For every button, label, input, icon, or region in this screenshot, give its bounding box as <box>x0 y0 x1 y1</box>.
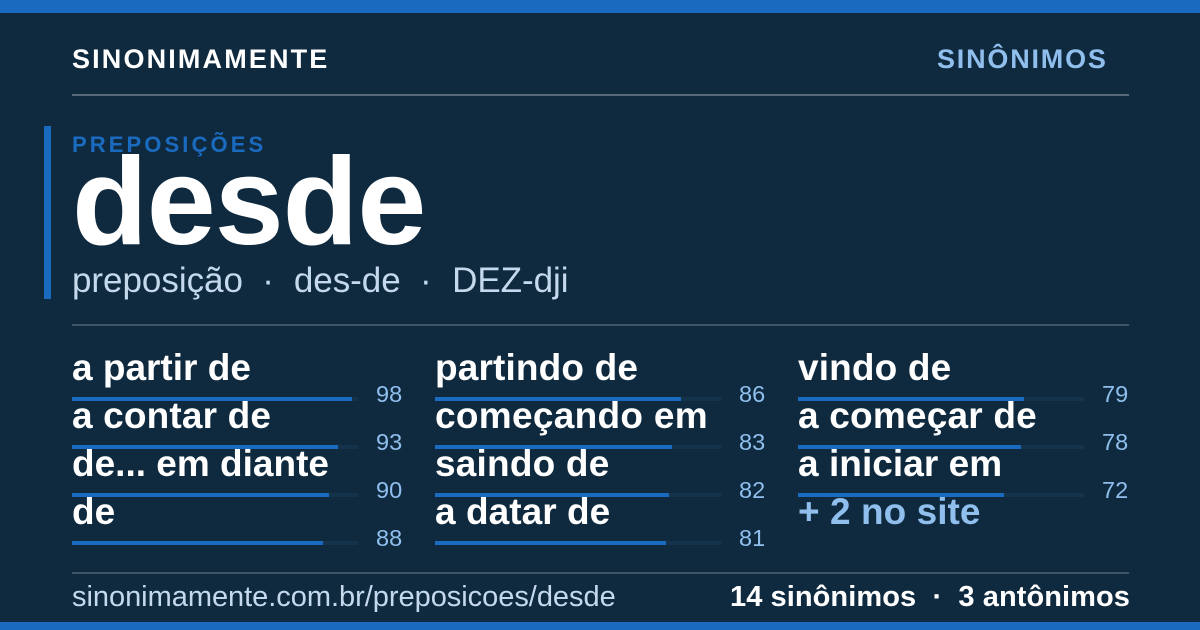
top accent bar <box>0 0 1200 13</box>
synonym column 3: + 2 no site <box>798 491 981 532</box>
synonym column 3: 72 <box>1102 477 1128 503</box>
synonym column 2: partindo de <box>435 347 638 388</box>
footer counts: 14 sinônimos · 3 antônimos <box>730 581 1130 613</box>
synonym column 1: de <box>72 491 115 532</box>
bottom accent bar <box>0 622 1200 630</box>
synonym column 2: 81 <box>739 525 765 551</box>
synonym column 2: 82 <box>739 477 765 503</box>
synonym column 1 <box>72 347 402 551</box>
synonym column 1: a partir de <box>72 347 251 388</box>
hero accent bar <box>44 126 51 299</box>
synonym column 1: 98 <box>376 381 402 407</box>
synonym column 3: a começar de <box>798 395 1037 436</box>
category label: PREPOSIÇÕES <box>72 132 266 157</box>
synonym column 2: começando em <box>435 395 708 436</box>
synonym column 2: 86 <box>739 381 765 407</box>
synonym column 1: 88 <box>376 525 402 551</box>
pronunciation line: preposição · des-de · DEZ-dji <box>72 261 569 300</box>
synonym column 2: a datar de <box>435 491 610 532</box>
synonym column 3: 78 <box>1102 429 1128 455</box>
synonym column 1: de... em diante <box>72 443 329 484</box>
synonyms grid <box>72 347 1128 551</box>
synonym column 2: 83 <box>739 429 765 455</box>
synonym column 1: 93 <box>376 429 402 455</box>
headword: desde <box>72 133 425 271</box>
synonym column 1: a contar de <box>72 395 271 436</box>
brand name: SINONIMAMENTE <box>72 44 329 74</box>
synonym column 2 <box>435 347 765 551</box>
synonym column 2: saindo de <box>435 443 610 484</box>
synonym column 3 <box>798 347 1128 532</box>
synonym column 3: a iniciar em <box>798 443 1002 484</box>
section label: SINÔNIMOS <box>937 44 1108 74</box>
synonym column 1: 90 <box>376 477 402 503</box>
synonym column 3: 79 <box>1102 381 1128 407</box>
footer url: sinonimamente.com.br/preposicoes/desde <box>72 581 616 613</box>
synonym column 3: vindo de <box>798 347 951 388</box>
